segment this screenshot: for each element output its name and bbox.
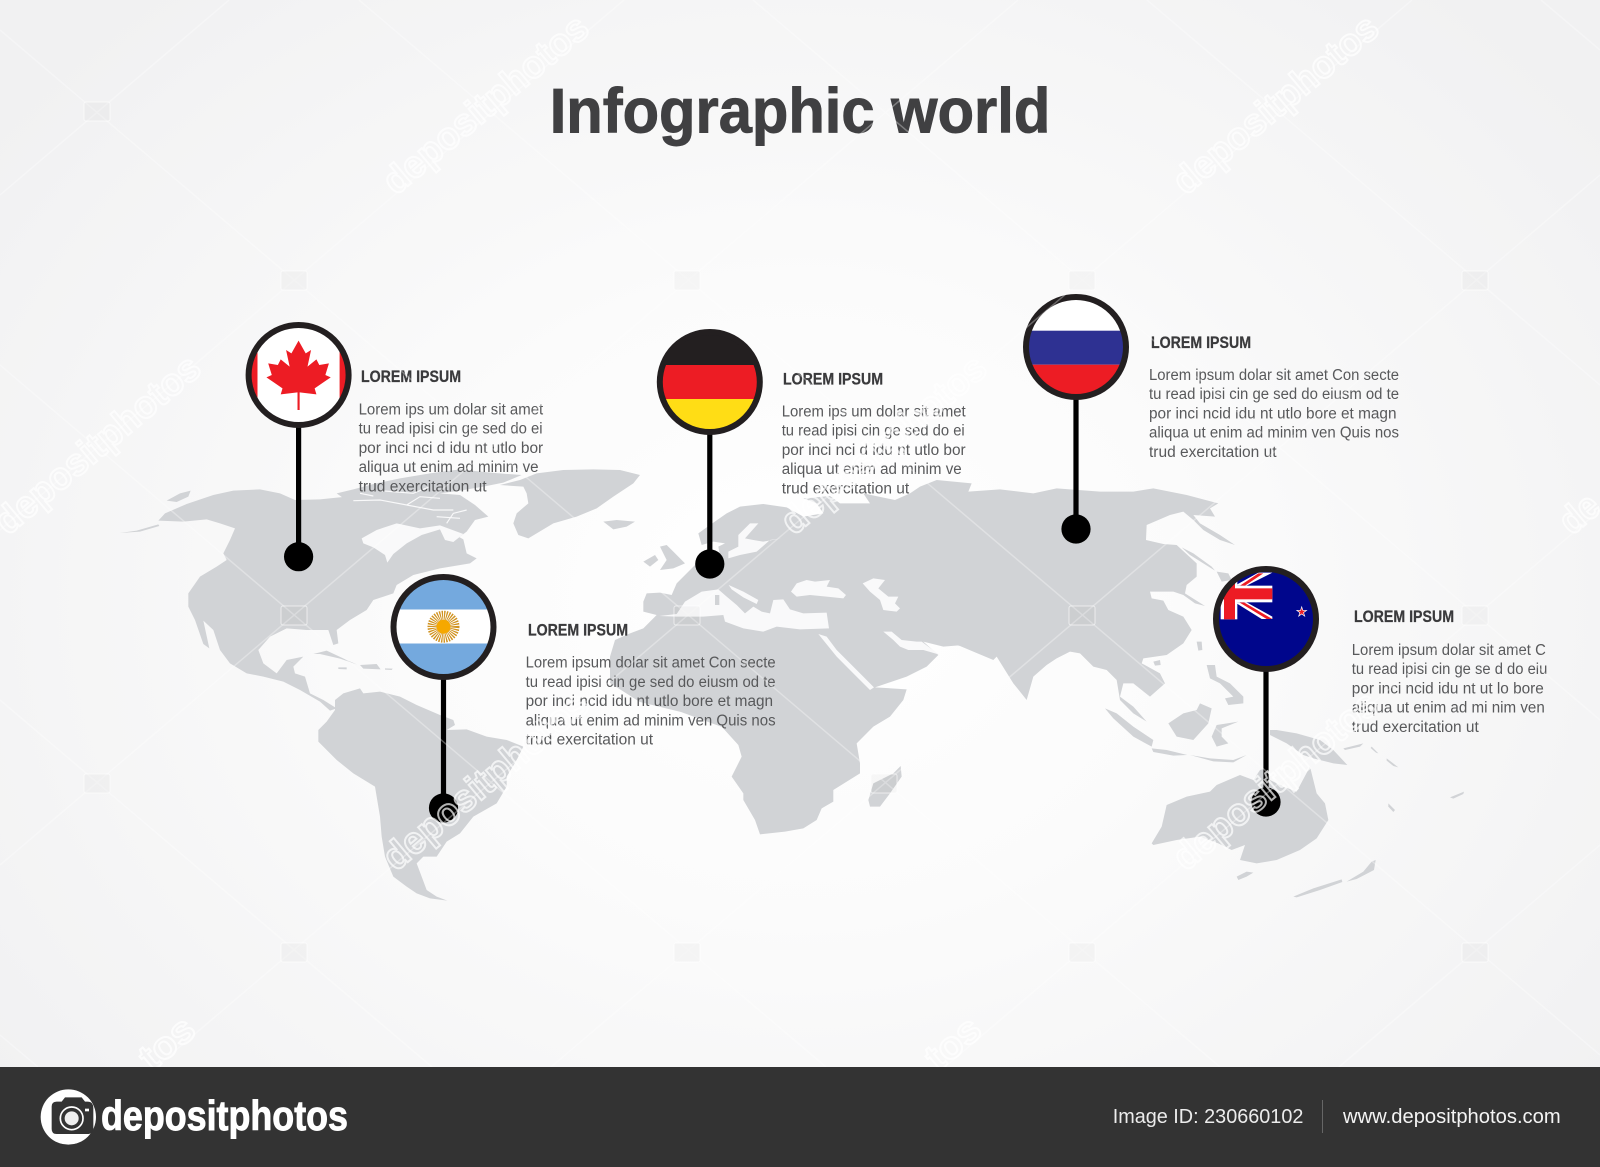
text block: New Zealand: por inci ncid idu nt ut lo bore [1352,680,1544,697]
text block: Argentina: tu read ipisi cin ge sed do eiusm od te [526,674,776,691]
pin: Canada [249,325,349,571]
pin ring [249,325,349,425]
text block: Germany: tu read ipisi cin ge sed do ei [782,423,965,440]
text block: New Zealand: LOREM IPSUM [1354,608,1454,626]
pin: Germany [660,332,760,579]
text block: Russia: LOREM IPSUM [1151,334,1251,352]
text block: New Zealand: trud exercitation ut [1352,719,1479,736]
footer bar [0,1067,1600,1167]
flag: Germany [660,334,760,431]
flag: Canada [252,340,346,410]
Europe, Africa and western Asia [610,493,997,834]
image id: Image ID: 230660102 [1113,1106,1303,1128]
text block: Germany [782,370,966,497]
text block: New Zealand: tu read ipisi cin ge se d do eiu [1352,661,1547,678]
website url: www.depositphotos.com [1342,1106,1561,1128]
pin stem and dot [284,425,313,571]
text block: Argentina: por inci ncid idu nt utlo bore et magn [526,693,773,710]
watermark camera icons [84,102,1488,962]
text block: Canada: tu read ipisi cin ge sed do ei [359,421,543,438]
text block: New Zealand: Lorem ipsum dolar sit amet C [1352,642,1546,659]
text block: Russia [1149,334,1399,461]
pin: Russia [1026,297,1126,544]
Oceania [1152,730,1464,897]
text block: Germany: por inci nci d idu nt utlo bor [782,442,966,459]
logo icon: camera [41,1089,96,1145]
pin ring [394,577,494,677]
watermark logos: depositphotos [375,7,597,203]
text block: Argentina: aliqua ut enim ad minim ven Quis nos [526,712,776,729]
pin stem and dot [429,677,458,823]
text block: Germany: Lorem ips um dolar sit amet [782,404,966,420]
text block: Russia: tu read ipisi cin ge sed do eiusm od te [1149,386,1399,403]
watermark logos: depositphotos [1165,7,1387,203]
text block: Russia: trud exercitation ut [1149,444,1277,461]
pin: Argentina [394,577,494,823]
text block: Canada: por inci nci d idu nt utlo bor [359,440,543,457]
watermark logos: tos [917,1008,990,1079]
world map [120,469,1464,901]
text block: Germany: LOREM IPSUM [783,370,883,388]
text block: Russia: aliqua ut enim ad minim ven Quis nos [1149,425,1399,442]
logo wordmark: depositphotos [101,1092,348,1139]
text block: Argentina: Lorem ipsum dolar sit amet Con secte [526,655,776,672]
Asia [900,480,1247,762]
text block: Canada: Lorem ips um dolar sit amet [359,402,544,418]
pin ring [660,332,760,432]
text block: Germany: trud exercitation ut [782,480,910,497]
South America [318,688,523,901]
pin stem and dot [1251,669,1281,817]
text block: Canada: LOREM IPSUM [361,368,461,386]
flag: Russia [1029,330,1123,394]
watermark logos: depositphotos [1165,683,1387,879]
flag: Argentina [400,580,488,674]
flag: New Zealand [1216,569,1316,669]
text block: Canada: aliqua ut enim ad minim ve [359,459,539,476]
pin ring [1026,297,1126,397]
text block: Germany: aliqua ut enim ad minim ve [782,461,962,478]
pin stem and dot [695,432,724,579]
text block: Russia: por inci ncid idu nt utlo bore et magn [1149,405,1396,422]
watermark logos: depositphotos [773,347,995,543]
text block: New Zealand [1352,608,1547,736]
pin stem and dot [1061,397,1091,544]
North America [120,469,640,711]
text block: Argentina: trud exercitation ut [526,732,654,748]
inland seas [659,523,939,690]
watermark logos: depositphotos [375,683,597,879]
text block: Argentina [526,622,776,748]
pin: New Zealand [1216,569,1316,817]
title: Infographic world [550,76,1050,146]
text block: Canada [359,368,544,495]
pin ring [1216,569,1316,669]
text block: Argentina: LOREM IPSUM [528,622,628,640]
text block: New Zealand: aliqua ut enim ad mi nim ven [1352,700,1545,717]
watermark logos: tos [131,1008,204,1079]
text block: Russia: Lorem ipsum dolar sit amet Con secte [1149,367,1399,384]
text block: Canada: trud exercitation ut [359,478,487,495]
